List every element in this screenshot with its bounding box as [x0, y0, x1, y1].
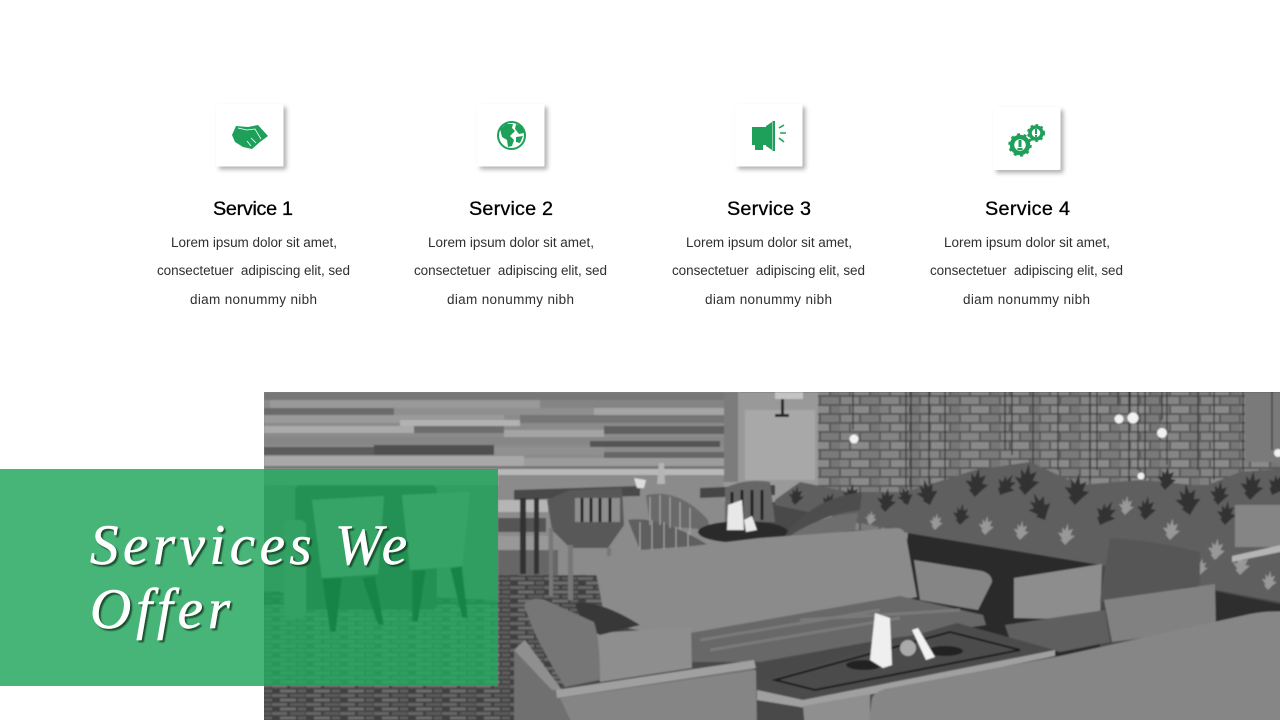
service 4: [930, 107, 1123, 307]
description: Lorem ipsum dolor sit amet,: [428, 235, 594, 250]
heading: Service 2: [469, 198, 553, 220]
description: consectetuer adipiscing elit, sed: [672, 263, 865, 278]
description: consectetuer adipiscing elit, sed: [930, 263, 1123, 278]
icon card: handshake: [216, 104, 284, 166]
hanging cords: [853, 392, 1272, 510]
back tables and wooden chairs: [514, 463, 862, 600]
left armchair: [514, 599, 757, 720]
description: [157, 235, 350, 307]
title: Offer: [90, 578, 231, 641]
description: [672, 235, 865, 307]
description: consectetuer adipiscing elit, sed: [414, 263, 607, 278]
service 3: [672, 104, 865, 307]
title: Services We: [90, 514, 407, 577]
description: [930, 235, 1123, 307]
coffee table: [757, 613, 1055, 720]
description: Lorem ipsum dolor sit amet,: [171, 235, 337, 250]
description: diam nonummy nibh: [705, 292, 832, 307]
heading: Service 1: [213, 198, 293, 220]
main sofa: [594, 528, 992, 662]
description: diam nonummy nibh: [190, 292, 317, 307]
front sofa: [868, 611, 1280, 720]
icon card: gears: [993, 107, 1060, 170]
description: [414, 235, 607, 307]
icon card: megaphone: [735, 104, 802, 166]
title: [90, 514, 407, 641]
floor: [240, 575, 610, 720]
icon card: globe: [477, 104, 544, 166]
heading: Service 3: [727, 198, 811, 220]
heading: Service 4: [985, 198, 1070, 220]
description: consectetuer adipiscing elit, sed: [157, 263, 350, 278]
description: diam nonummy nibh: [447, 292, 574, 307]
chairs under the green panel: [284, 485, 470, 632]
plants: [775, 462, 1280, 604]
photo: restaurant interior in greyscale: [240, 380, 1280, 720]
description: Lorem ipsum dolor sit amet,: [686, 235, 852, 250]
right armchair: [1005, 538, 1216, 652]
pendant bulbs: [850, 412, 1280, 480]
service 2: [414, 104, 607, 307]
description: Lorem ipsum dolor sit amet,: [944, 235, 1110, 250]
dark planter: [900, 533, 1100, 670]
green title panel: [0, 469, 498, 686]
description: diam nonummy nibh: [963, 292, 1090, 307]
service 1: [157, 104, 350, 307]
